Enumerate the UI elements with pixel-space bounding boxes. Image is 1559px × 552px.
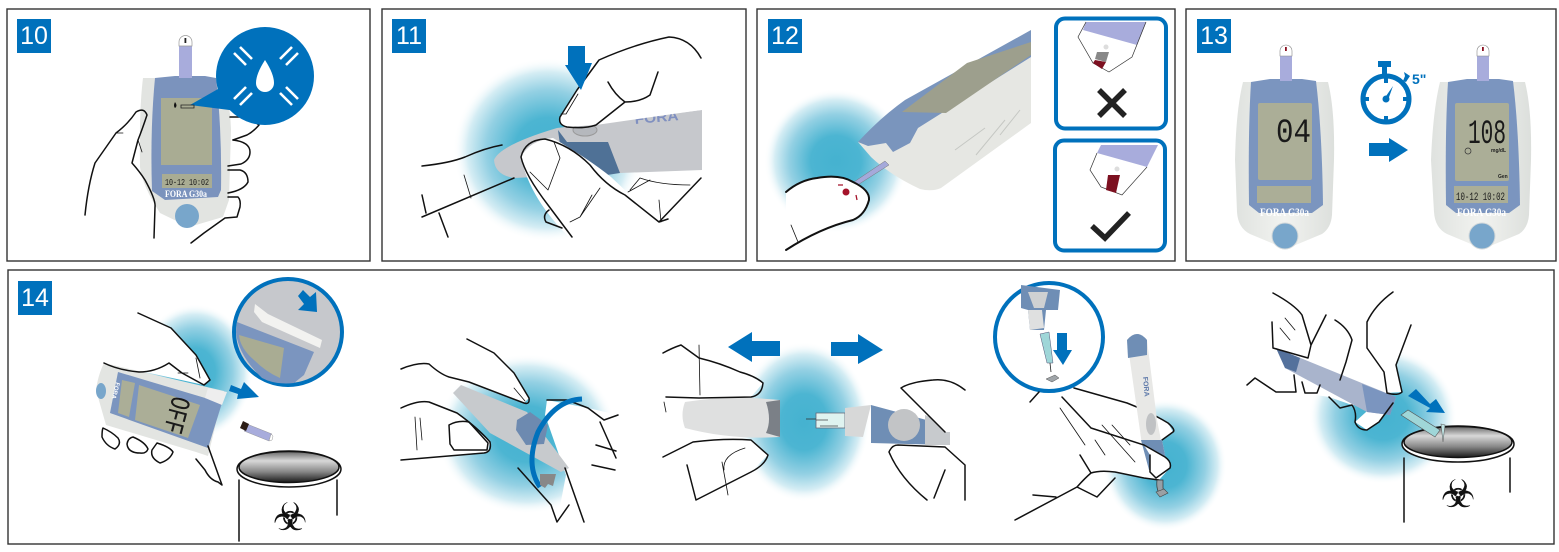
wrong sample box (1056, 18, 1166, 128)
step number 11 (392, 19, 426, 53)
stopwatch icon with 5 seconds: 5" (1412, 71, 1426, 87)
hand outline (85, 110, 259, 243)
step number 12: 12 (771, 22, 799, 50)
step number 11: 11 (396, 22, 422, 50)
glow behind lancing device (437, 354, 617, 514)
glow behind hand (1103, 399, 1227, 531)
biohazard bin (1402, 426, 1514, 522)
biohazard bin: ☣ (273, 495, 307, 539)
meter showing 108: 10-12 10:02 (1456, 192, 1505, 204)
hand and upright lancing device: FORA (1141, 377, 1150, 397)
meter showing 04 (1235, 45, 1334, 249)
test strip (851, 161, 889, 186)
blue glow (453, 58, 643, 242)
eject arrow (229, 382, 259, 399)
meter showing 04: 04 (1276, 115, 1311, 153)
tilted meter (858, 30, 1031, 190)
meter showing 108: FORA G30a (1457, 207, 1506, 219)
separated lancet and body with fingers (806, 380, 965, 500)
inset circle: eject slider (234, 279, 342, 385)
tilted meter showing OFF: FORA (109, 381, 120, 400)
lancing device: FORA (634, 107, 679, 127)
tilted meter showing OFF (96, 313, 227, 456)
tilted meter showing OFF: OFF (155, 393, 194, 436)
X mark (1099, 90, 1125, 116)
inset circle: removing lancet (995, 283, 1103, 391)
used test strip (240, 421, 273, 441)
step number 14 (18, 281, 52, 315)
glow behind separated device (738, 342, 870, 502)
blue disposal arrow (1408, 389, 1445, 413)
callout: blood drop symbol (174, 27, 314, 125)
panel 14: dispose of strip and lancet (8, 270, 1554, 544)
separated cap and fingers (663, 345, 780, 500)
biohazard bin (237, 451, 341, 541)
meter showing 108: 108 (1468, 116, 1506, 154)
meter showing 04: FORA G30a (1260, 207, 1309, 219)
pull apart arrows (728, 332, 883, 364)
fingertip with blood drop (786, 177, 869, 250)
lancing device and twisting hand (401, 339, 618, 522)
hand holding meter (102, 313, 222, 485)
meter showing 108: Gen (1498, 174, 1508, 180)
meter held in hand: 10-12 10:02 (165, 178, 209, 188)
step number 12 (768, 19, 802, 53)
step number 13: 13 (1200, 22, 1228, 50)
meter held in hand (140, 36, 231, 228)
meter edge held by fingers (1247, 292, 1411, 430)
rotation ring (532, 399, 582, 487)
lancing device (494, 107, 702, 230)
step number 10 (17, 19, 51, 53)
blue down arrow (565, 46, 592, 90)
step number 10: 10 (20, 22, 48, 50)
blue glow (764, 89, 908, 233)
upper finger (560, 37, 701, 128)
grey rotation arrowhead (540, 474, 556, 488)
lancet falling into bin (1401, 410, 1445, 442)
right arrow (1369, 138, 1408, 162)
meter showing 108: mg/dL (1491, 148, 1506, 154)
correct sample box (1055, 140, 1165, 250)
panel 10: apply blood prompt (7, 9, 370, 261)
glow behind meter (137, 304, 253, 440)
meter held in hand: FORA G30a (165, 190, 207, 200)
meter showing 108 (1431, 45, 1531, 249)
glow behind meter over bin (1309, 348, 1457, 484)
step number 14: 14 (21, 284, 49, 312)
step number 13 (1197, 19, 1231, 53)
biohazard bin: ☣ (1441, 472, 1475, 516)
hand and upright lancing device (1015, 334, 1174, 520)
lower thumb and fingers (422, 138, 701, 240)
panel 11: pressing the lancing device (382, 9, 746, 261)
stopwatch icon with 5 seconds (1363, 61, 1426, 122)
panel 13: countdown and result (1186, 9, 1556, 261)
panel 12: apply sample to strip (757, 9, 1175, 261)
check mark (1092, 213, 1129, 238)
